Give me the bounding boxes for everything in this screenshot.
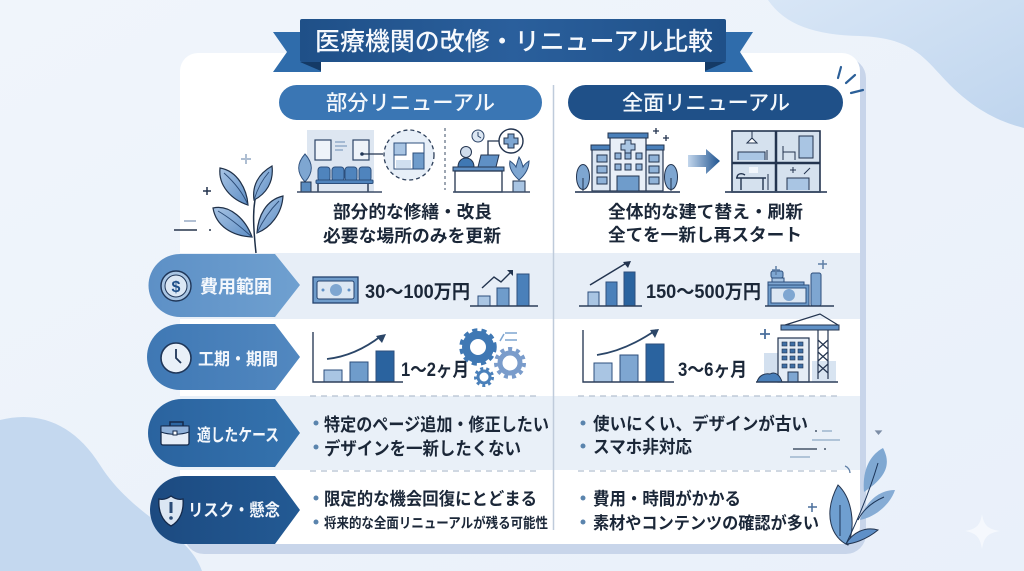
cost left: bar chart <box>470 270 538 306</box>
dashed separator in illustration <box>444 128 446 190</box>
row label: cost: 費用範囲 <box>200 276 272 297</box>
cost right: bar chart <box>579 261 642 306</box>
cost right: money stack <box>765 260 834 306</box>
icon: shield <box>159 496 183 526</box>
row label: risk <box>150 476 300 544</box>
icon: briefcase <box>161 422 189 445</box>
cost left: banknote <box>313 277 358 303</box>
row band: cost <box>180 253 860 319</box>
row label: suitable cases: 適したケース <box>197 426 279 445</box>
period right: duration: 3〜6ヶ月 <box>678 360 747 381</box>
heading pill: partial renewal <box>279 85 542 120</box>
period left: gears <box>462 330 524 386</box>
description: full renewal: 全体的な建て替え・刷新 <box>608 202 803 222</box>
illustration: renewed rooms <box>725 131 827 192</box>
description: full renewal: 全てを一新し再スタート <box>608 225 802 245</box>
bullets: risk right <box>580 489 819 533</box>
title text: 医療機関の改修・リニューアル比較 <box>315 28 713 56</box>
period right: bar chart <box>583 329 674 382</box>
cost left: amount: 30〜100万円 <box>365 282 470 303</box>
bullets: risk right: 素材やコンテンツの確認が多い <box>593 513 819 533</box>
plant: left decoration <box>174 154 283 253</box>
illustration: reception <box>453 129 530 192</box>
bullets: suitable right <box>580 414 808 457</box>
centre divider <box>552 85 554 530</box>
row band: suitable cases <box>180 396 860 470</box>
row label: cost <box>148 254 300 317</box>
decorative dashes <box>790 431 881 473</box>
icon: dollar coin: $ <box>172 279 181 296</box>
description: full renewal <box>608 202 803 245</box>
illustration: waiting room <box>297 130 434 192</box>
bullets: suitable left: デザインを一新したくない <box>324 438 521 459</box>
bullets: risk left: 将来的な全面リニューアルが残る可能性 <box>324 515 548 531</box>
row label: period: 工期・期間 <box>198 350 278 369</box>
heading pill: partial renewal: 部分リニューアル <box>326 92 495 115</box>
period right: construction <box>756 314 839 382</box>
heading pill: full renewal: 全面リニューアル <box>622 92 790 115</box>
background blob: top right <box>768 0 1024 128</box>
description: partial renewal <box>323 202 501 246</box>
heading pill: full renewal <box>568 85 843 120</box>
row label: period <box>147 324 300 390</box>
bullets: suitable left: 特定のページ追加・修正したい <box>324 415 549 435</box>
background blob: bottom left <box>0 417 202 571</box>
bullets: suitable right: スマホ非対応 <box>593 437 692 457</box>
period left: duration: 1〜2ヶ月 <box>401 360 469 381</box>
sparkle <box>965 514 1000 549</box>
bullets: suitable left <box>314 415 549 459</box>
burst marks <box>838 67 863 93</box>
cost right: amount: 150〜500万円 <box>646 282 761 303</box>
arrow <box>688 149 720 174</box>
row label: suitable cases <box>148 399 300 467</box>
period left: bar chart <box>313 332 403 382</box>
plant: bottom right <box>808 448 895 545</box>
description: partial renewal: 必要な場所のみを更新 <box>323 226 501 246</box>
row label: risk: リスク・懸念 <box>188 501 280 520</box>
description: partial renewal: 部分的な修繕・改良 <box>333 202 492 222</box>
title ribbon <box>273 19 753 72</box>
bullets: risk right: 費用・時間がかかる <box>593 489 741 509</box>
icon: clock <box>161 343 191 373</box>
icon: dollar coin <box>161 271 191 301</box>
card <box>180 53 866 554</box>
bullets: risk left: 限定的な機会回復にとどまる <box>324 489 537 509</box>
bullets: risk left <box>314 489 548 531</box>
illustration: hospital <box>575 128 680 192</box>
bullets: suitable right: 使いにくい、デザインが古い <box>593 414 808 434</box>
